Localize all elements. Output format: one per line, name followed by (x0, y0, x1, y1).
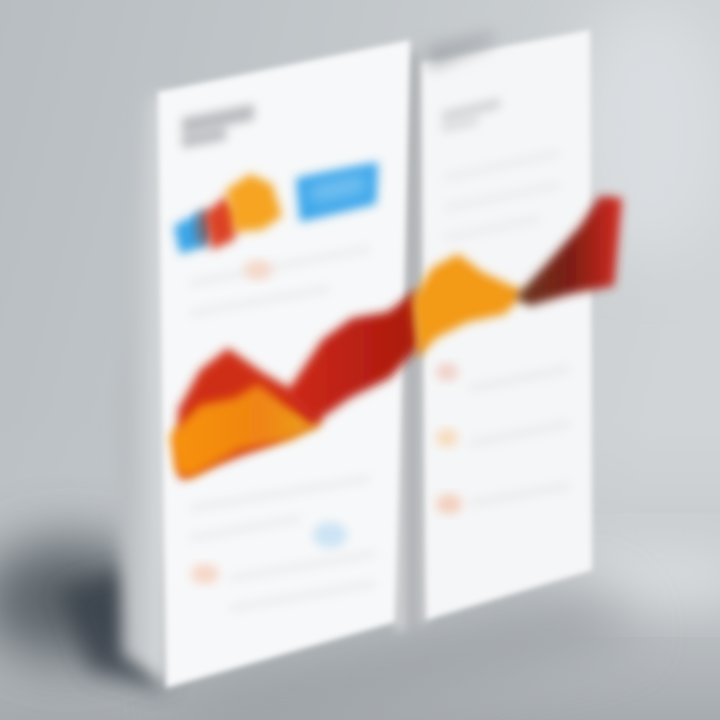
icon markers (436, 363, 458, 381)
brochure centre gutter (396, 45, 430, 632)
heading placeholder (442, 98, 500, 132)
top edge shadow (424, 32, 496, 68)
red segment (204, 196, 240, 250)
wave ribbon: left red/orange (170, 348, 322, 480)
icon: peach marker (191, 564, 219, 584)
top chart cluster (174, 162, 378, 254)
panel: right page (422, 30, 592, 620)
wave ribbon: dark red tail (515, 196, 622, 306)
panel: left page (158, 40, 410, 688)
blue box (296, 162, 378, 222)
floor shadow (0, 540, 640, 720)
icon: small peach marker (244, 260, 272, 280)
blue wedge (174, 212, 205, 254)
orange peak (226, 174, 282, 232)
icon: blue marker (313, 522, 347, 548)
wave ribbon: orange crossing gutter (412, 254, 525, 358)
grey-blue link (195, 210, 213, 246)
faint text (190, 245, 375, 612)
faint lines (445, 150, 570, 507)
heading placeholder (182, 104, 254, 148)
wave ribbon: middle red (285, 290, 420, 425)
brochure spine: left side (118, 92, 170, 688)
